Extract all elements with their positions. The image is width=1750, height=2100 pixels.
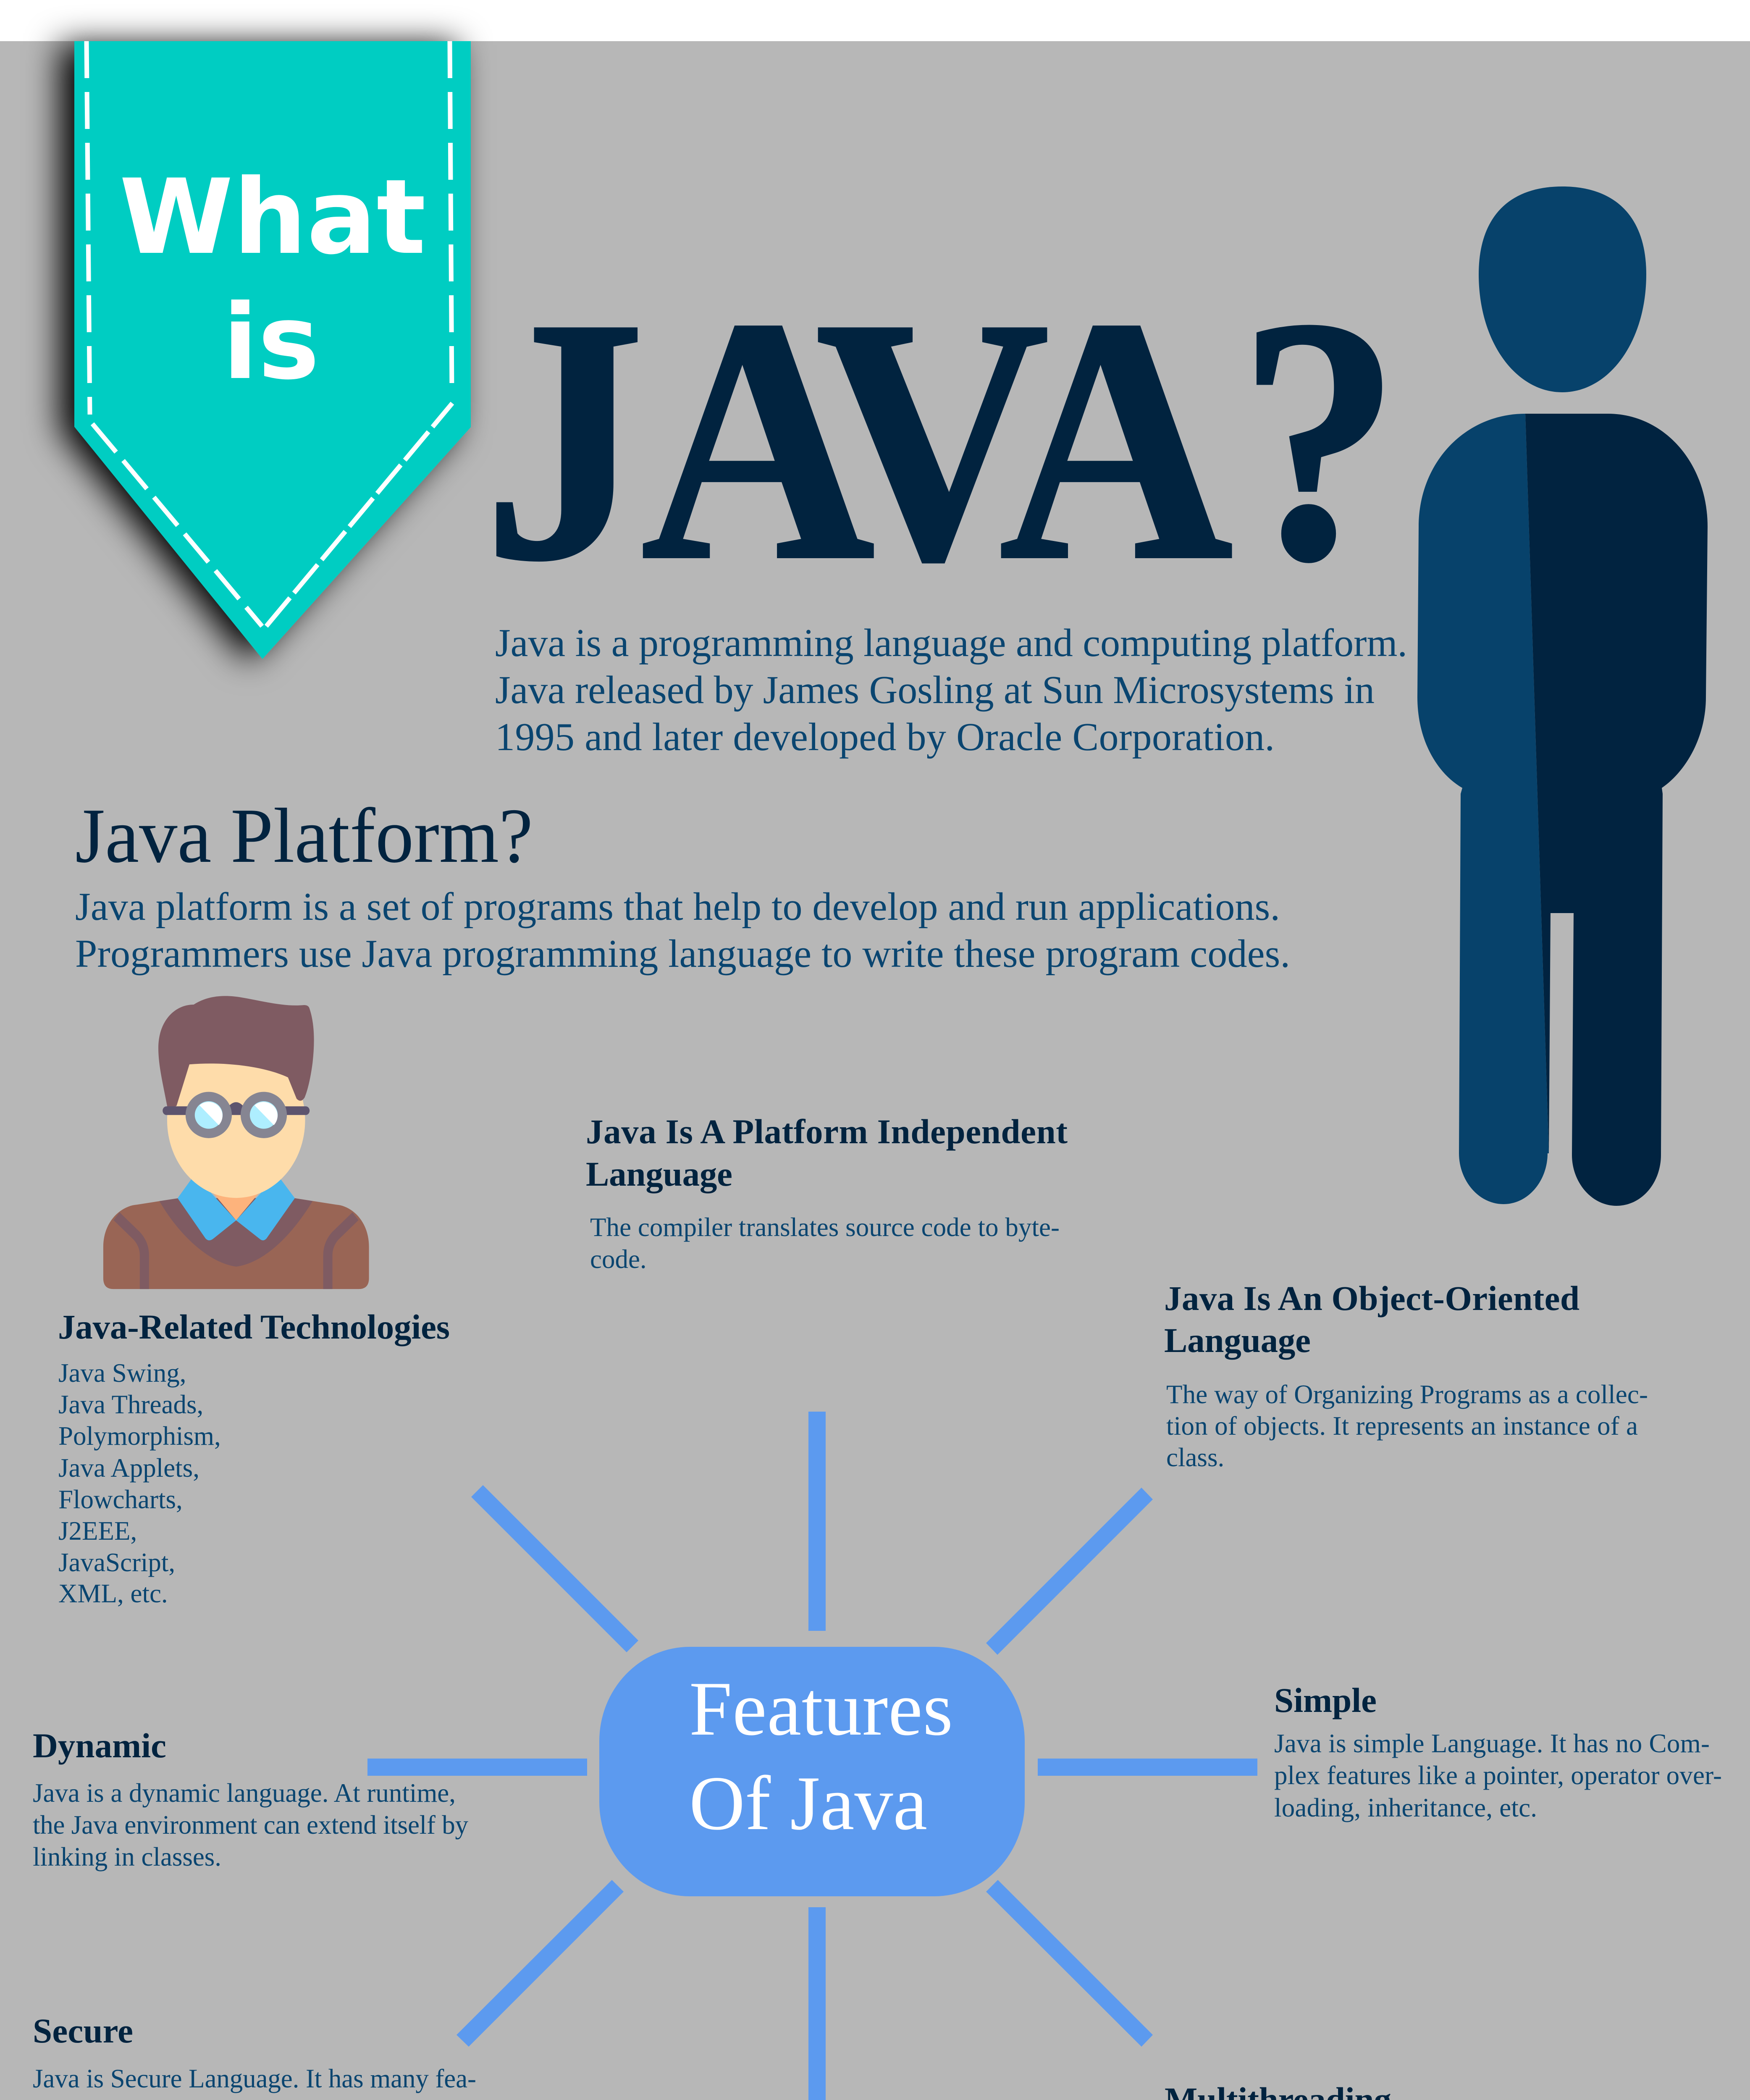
- text block: Object-Oriented: Java Is An Object-Oriented: [1164, 1279, 1579, 1318]
- text block: Java-Related Technologies: [58, 1307, 450, 1608]
- text block: Platform Independent: code.: [590, 1244, 647, 1274]
- ribbon: What is: is: [223, 283, 320, 403]
- text block: Dynamic: Dynamic: [33, 1726, 166, 1765]
- text block: Java-Related Technologies: Java Applets,: [58, 1453, 199, 1483]
- text block: Object-Oriented: tion of objects. It represents an instance of a: [1166, 1411, 1638, 1441]
- ribbon stitching: [87, 41, 452, 626]
- icon: standing person silhouette: [1417, 186, 1708, 1206]
- text block: Simple: [1274, 1681, 1722, 1822]
- rays: [367, 1412, 1257, 2100]
- text block: Secure: [33, 2011, 476, 2100]
- collar: [178, 1179, 295, 1240]
- neck: [211, 1190, 261, 1221]
- text block: Secure: Java is Secure Language. It has many fea-: [33, 2064, 476, 2093]
- text block: Secure: Secure: [33, 2011, 133, 2050]
- body dark half: [1525, 414, 1708, 1206]
- text block: Java-Related Technologies: Java-Related Technologies: [58, 1307, 450, 1346]
- intro paragraph: Java is a programming language and computing platform.: [495, 621, 1407, 665]
- hub box: [599, 1647, 1025, 1896]
- glasses: [163, 1106, 310, 1115]
- title: JAVA?: JAVA?: [483, 247, 1400, 633]
- text block: Simple: plex features like a pointer, operator over-: [1274, 1761, 1722, 1790]
- text block: Java-Related Technologies: Polymorphism,: [58, 1421, 221, 1451]
- intro paragraph: Java released by James Gosling at Sun Microsystems in: [495, 668, 1375, 712]
- hub text: Features: [689, 1666, 953, 1751]
- text block: Java-Related Technologies: Flowcharts,: [58, 1485, 183, 1514]
- text block: Platform Independent: [586, 1112, 1068, 1274]
- ribbon: What is: [74, 41, 471, 659]
- text block: Platform Independent: Language: [586, 1155, 732, 1193]
- diagram: Features of Java hub and rays: Of Java: [689, 1760, 927, 1846]
- text block: Dynamic: linking in classes.: [33, 1842, 221, 1872]
- text block: Java-Related Technologies: JavaScript,: [58, 1548, 175, 1577]
- head: [1479, 186, 1646, 392]
- text block: Platform Independent: The compiler translates source code to byte-: [590, 1213, 1060, 1242]
- text block: Java-Related Technologies: XML, etc.: [58, 1579, 168, 1608]
- text block: Object-Oriented: The way of Organizing Programs as a collec-: [1166, 1380, 1648, 1409]
- intro paragraph: 1995 and later developed by Oracle Corporation.: [495, 715, 1275, 759]
- hair: [158, 996, 314, 1110]
- text block: Object-Oriented: class.: [1166, 1443, 1224, 1472]
- top white band: [0, 0, 1750, 41]
- diagram: Features of Java hub and rays: [367, 1412, 1257, 2100]
- intro paragraph: [495, 621, 1407, 759]
- Java platform paragraph: [75, 885, 1290, 976]
- text block: Java-Related Technologies: Java Threads,: [58, 1390, 203, 1419]
- text block: Dynamic: Java is a dynamic language. At runtime,: [33, 1778, 456, 1808]
- text block: Object-Oriented: Language: [1164, 1321, 1311, 1360]
- face: [167, 1043, 305, 1198]
- text block: Dynamic: the Java environment can extend itself by: [33, 1810, 469, 1840]
- heading: Java Platform?: Java Platform?: [75, 793, 533, 879]
- body light half: [1417, 414, 1549, 1204]
- text block: Java-Related Technologies: Java Swing,: [58, 1358, 186, 1388]
- text block: Java-Related Technologies: J2EEE,: [58, 1516, 137, 1546]
- Java platform paragraph: Programmers use Java programming language to write these program codes.: [75, 932, 1290, 976]
- text block: Dynamic: [33, 1726, 469, 1872]
- text block: Simple: Java is simple Language. It has no Com-: [1274, 1729, 1710, 1758]
- ribbon shape: [74, 41, 471, 659]
- text block: Simple: loading, inheritance, etc.: [1274, 1793, 1537, 1822]
- icon: programmer with glasses: [103, 996, 369, 1289]
- text block: Platform Independent: Java Is A Platform Independent: [586, 1112, 1068, 1151]
- sweater: [103, 1198, 369, 1289]
- text block: Simple: Simple: [1274, 1681, 1377, 1719]
- ribbon text: What: [119, 158, 426, 278]
- Java platform paragraph: Java platform is a set of programs that help to develop and run applications.: [75, 885, 1280, 929]
- text block: Object-Oriented: [1164, 1279, 1648, 1472]
